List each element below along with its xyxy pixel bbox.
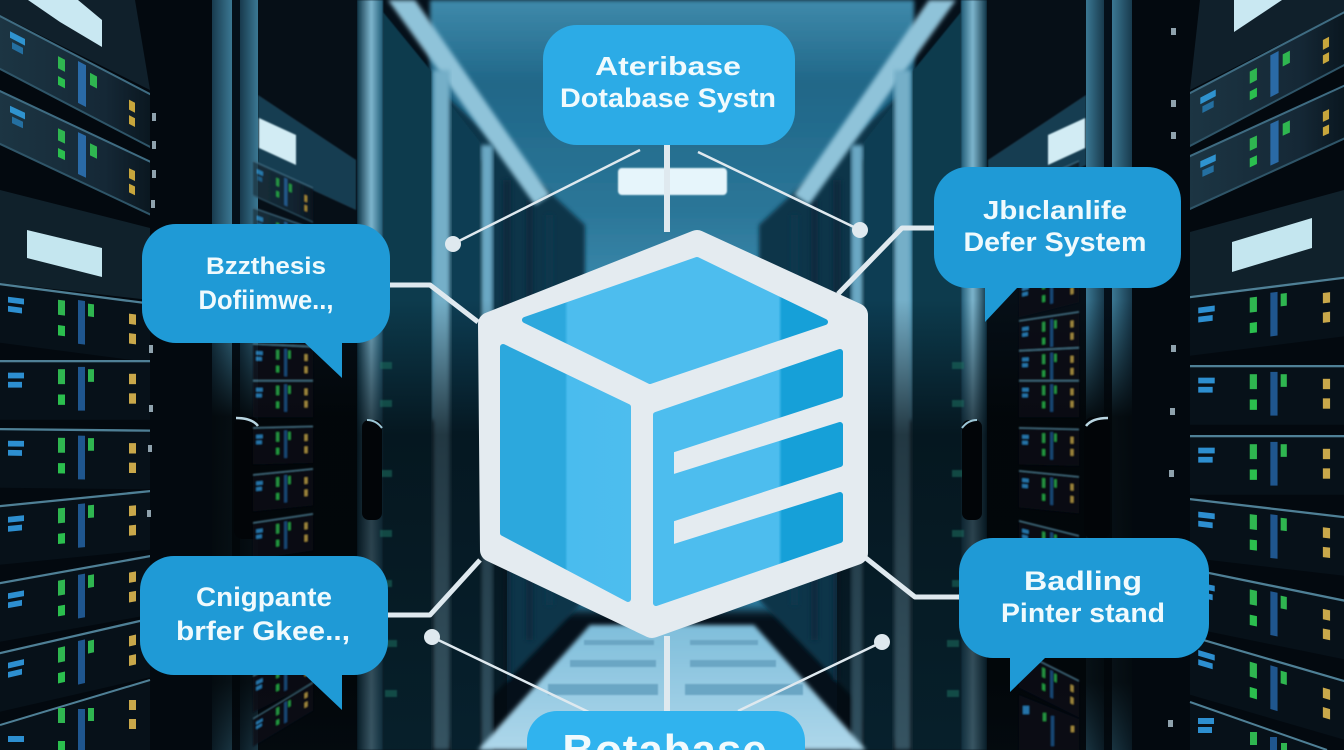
left upper callout text: Dofiimwe.., xyxy=(198,285,334,315)
left lower callout text xyxy=(176,582,350,646)
callout: bottom xyxy=(527,711,805,750)
corridor floor xyxy=(478,625,866,750)
callout: left lower xyxy=(140,556,388,710)
icon: database cube xyxy=(490,242,856,626)
left near rack xyxy=(0,0,156,750)
left upper callout text: Bzzthesis xyxy=(206,253,326,280)
connector end dots xyxy=(424,222,890,650)
right upper callout text: Defer System xyxy=(964,227,1146,257)
cube left face xyxy=(503,347,628,599)
left lower callout text: Cnigpante xyxy=(196,582,332,612)
right upper callout text xyxy=(964,195,1146,257)
ceiling light xyxy=(618,168,727,195)
corridor ceiling and back wall xyxy=(430,0,914,420)
left corridor wall xyxy=(0,0,585,750)
callout: right lower xyxy=(959,538,1209,692)
corridor lower wall xyxy=(530,400,814,610)
callout: right upper xyxy=(934,167,1181,322)
cube top face xyxy=(525,260,825,381)
top callout text: Dotabase Systn xyxy=(560,83,776,113)
cube outline xyxy=(490,242,856,626)
right lower callout text: Pinter stand xyxy=(1001,598,1165,628)
callout: left upper xyxy=(142,224,390,378)
right second rack units xyxy=(1019,160,1079,750)
right corridor wall xyxy=(759,0,1344,750)
right near rack xyxy=(1168,0,1344,750)
left upper callout text xyxy=(198,253,334,315)
left second rack units xyxy=(253,160,313,747)
cube right face with bars xyxy=(656,352,840,603)
callout: top xyxy=(543,25,795,145)
top callout text: Ateribase xyxy=(595,51,741,81)
right lower callout text: Badling xyxy=(1024,566,1142,596)
right lower callout text xyxy=(1001,566,1165,628)
right upper callout text: Jbıclanlife xyxy=(983,195,1127,225)
connector lines xyxy=(388,145,960,716)
left lower callout text: brfer Gkee.., xyxy=(176,616,350,646)
floor vents xyxy=(548,640,803,695)
top callout text xyxy=(560,51,776,113)
